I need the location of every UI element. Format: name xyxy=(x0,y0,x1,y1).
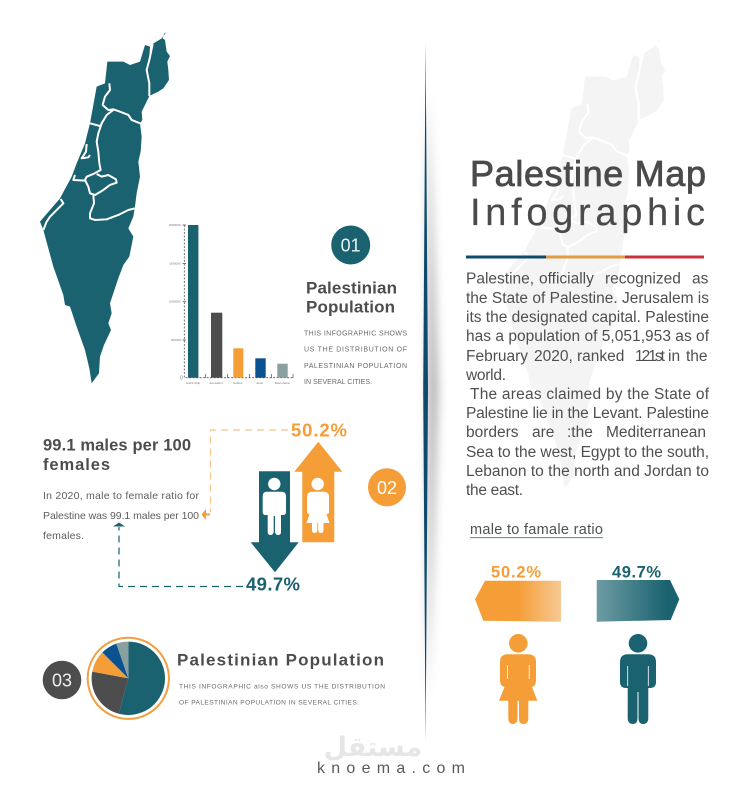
male banner: 49.7% xyxy=(612,564,661,582)
tricolor rule xyxy=(466,256,704,258)
text: description paragraphs: The areas claimed by the State of xyxy=(470,386,710,403)
heading: 99.1 males per 100 females: females xyxy=(43,456,110,474)
title: Infographic xyxy=(470,192,705,234)
heading: 99.1 males per 100 females xyxy=(43,437,191,474)
text: description paragraphs: officially xyxy=(539,271,594,288)
bar chart: Gaza Strip xyxy=(186,381,201,385)
badge 03 xyxy=(43,661,81,699)
text: section 01 description: IN SEVERAL CITIES. xyxy=(304,379,372,386)
connector: teal dashed arrow xyxy=(113,522,243,586)
text: description paragraphs: Mediterranean xyxy=(606,424,706,441)
text: section 03 description: OF PALESTINIAN POPULATION IN SEVERAL CITIES. xyxy=(179,700,359,707)
value: 50.2%: 50.2% xyxy=(291,420,347,441)
text: description paragraphs: recognized xyxy=(605,271,681,288)
text: description paragraphs: the xyxy=(686,348,708,365)
background map (ghost) xyxy=(499,38,665,488)
text: male to female ratio description: Palestine was 99.1 males per 100 xyxy=(43,510,199,522)
text: description paragraphs: the east. xyxy=(466,482,523,499)
heading: Palestinian Population xyxy=(306,278,397,317)
text: description paragraphs: :the xyxy=(567,424,593,441)
text: description paragraphs: Sea to the west, Egypt to the south, xyxy=(466,444,709,461)
bar chart: 500000 xyxy=(171,338,181,342)
text: section 01 description: US THE DISTRIBUTION OF xyxy=(304,347,407,354)
bar chart: 2000000 xyxy=(169,223,181,227)
icon: man xyxy=(620,634,656,724)
text: male to female ratio description xyxy=(43,490,200,542)
watermark: mostaql: مستقل xyxy=(324,732,422,763)
connector: orange dashed arrow xyxy=(202,430,288,520)
central divider with shadow xyxy=(423,42,438,742)
text: description paragraphs xyxy=(465,271,710,499)
text: description paragraphs: 121st xyxy=(635,348,666,365)
main map xyxy=(40,32,170,383)
text: description paragraphs: are xyxy=(532,424,554,441)
female banner: 50.2% xyxy=(491,564,541,582)
text: section 01 description: PALESTINIAN POPULATION xyxy=(304,363,407,370)
subheading: male to famale ratio: male to famale ratio xyxy=(470,522,603,538)
text: description paragraphs: in xyxy=(668,348,680,365)
text: description paragraphs: Lebanon to the north and Jordan to xyxy=(466,463,709,480)
badge 02 xyxy=(368,468,406,506)
pie chart xyxy=(88,638,169,719)
text: description paragraphs: February xyxy=(466,348,528,365)
bar chart: Jenin xyxy=(256,381,264,385)
title: Palestine Map xyxy=(470,153,706,194)
bar chart: Nablus xyxy=(233,381,243,385)
arrow down with male icon xyxy=(251,471,299,572)
text: description paragraphs: as xyxy=(692,271,709,288)
male banner xyxy=(597,564,679,622)
text: description paragraphs: borders xyxy=(466,424,519,441)
badge 02: 02 xyxy=(377,478,397,498)
icon: woman xyxy=(499,634,537,724)
text: description paragraphs: has a population of 5,051,953 as of xyxy=(466,328,710,345)
arrow up with female icon xyxy=(294,442,342,542)
badge 01: 01 xyxy=(341,236,361,256)
bar chart: Beersheba xyxy=(275,381,290,385)
bar chart: 1500000 xyxy=(169,262,181,266)
female banner xyxy=(475,564,561,622)
bar chart: 1000000 xyxy=(169,300,181,304)
text: description paragraphs: world. xyxy=(465,367,506,384)
value: 49.7%: 49.7% xyxy=(246,574,300,595)
text: description paragraphs: the State of Palestine. Jerusalem is xyxy=(466,290,709,307)
heading: Palestinian Population: Palestinian xyxy=(306,278,397,297)
footer source: knoema.com xyxy=(317,760,465,777)
text: description paragraphs: Palestine lie in the Levant. Palestine xyxy=(466,405,709,422)
bar chart xyxy=(169,223,293,385)
heading: 99.1 males per 100 females: 99.1 males per 100 xyxy=(43,437,191,455)
text: male to female ratio description: females. xyxy=(43,530,84,542)
text: description paragraphs: Palestine, xyxy=(466,271,534,288)
text: section 01 description xyxy=(304,331,407,386)
badge 03: 03 xyxy=(52,670,72,690)
text: section 01 description: THIS INFOGRAPHIC SHOWS xyxy=(304,331,407,338)
text: description paragraphs: its the designated capital. Palestine xyxy=(466,309,709,326)
text: description paragraphs: ranked xyxy=(577,348,624,365)
text: male to female ratio description: In 2020, male to female ratio for xyxy=(43,490,200,502)
title xyxy=(470,153,706,234)
heading: section 03: Palestinian Population xyxy=(177,651,384,670)
text: description paragraphs: 2020, xyxy=(534,348,573,365)
text: section 03 description: THIS INFOGRAPHIC also SHOWS US THE DISTRIBUTION xyxy=(179,683,385,690)
heading: Palestinian Population: Population xyxy=(306,298,395,317)
text: section 03 description xyxy=(179,683,385,707)
badge 01 xyxy=(331,226,370,264)
bar chart: 0 xyxy=(180,376,183,382)
bar chart: Jerusalem xyxy=(209,381,223,385)
